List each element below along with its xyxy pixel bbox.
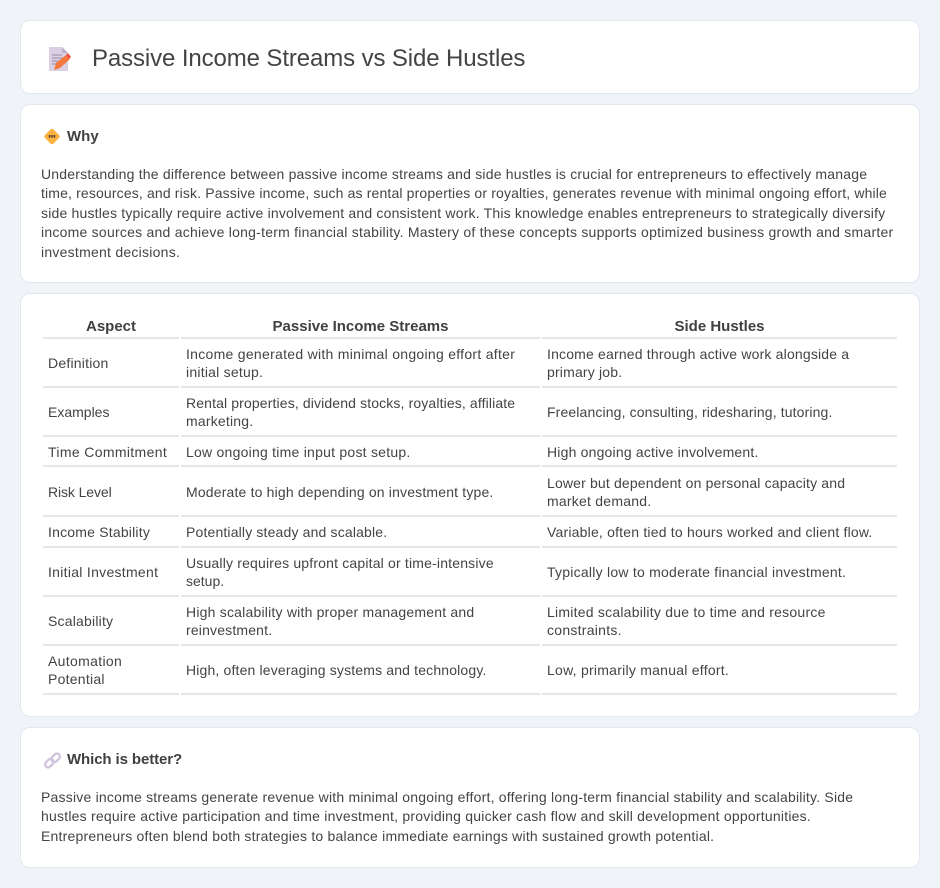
comparison table: Time Commitment [48, 444, 167, 460]
row: income stability [48, 524, 873, 540]
row: definition [48, 346, 850, 380]
comparison table: primary job. [547, 364, 622, 380]
panel: why: time, resources, and risk. Passive income, such as rental properties or royalties, generates revenue with minimal ongoing effort, while [41, 185, 887, 201]
comparison table: Scalability [48, 613, 113, 629]
comparison table: Variable, often tied to hours worked and client flow. [547, 524, 873, 540]
comparison table: initial setup. [186, 364, 263, 380]
comparison table: market demand. [547, 493, 651, 509]
comparison table: Initial Investment [48, 564, 158, 580]
comparison table: Potential [48, 671, 105, 687]
icon: document with pencil [49, 47, 71, 71]
comparison table: High scalability with proper management and [186, 604, 474, 620]
panel: why [20, 104, 920, 283]
title text: Passive Income Streams vs Side Hustles [92, 45, 525, 72]
comparison table: High, often leveraging systems and technology. [186, 662, 486, 678]
panel: which is better [20, 727, 920, 868]
comparison table: constraints. [547, 622, 622, 638]
comparison table: Side Hustles [674, 318, 765, 335]
panel: which is better: Entrepreneurs often blend both strategies to balance immediate earnings with sustained growth potential. [41, 828, 714, 844]
row: automation potential [48, 653, 729, 687]
comparison table: Limited scalability due to time and resource [547, 604, 826, 620]
icon: warning diamond [44, 128, 60, 144]
comparison table: Typically low to moderate financial investment. [547, 564, 846, 580]
icon: chain link [44, 752, 62, 769]
comparison table: Aspect [86, 318, 136, 335]
panel: which is better: hustles require active participation and time investment, providing quicker cash flow and skill development opportunities. [41, 808, 811, 824]
row: risk level [48, 475, 845, 509]
panel: why: side hustles typically require active involvement and consistent work. This knowledge enables entrepreneurs to strategically diversify [41, 205, 885, 221]
comparison table: Rental properties, dividend stocks, royalties, affiliate [186, 395, 515, 411]
comparison table: Income generated with minimal ongoing effort after [186, 346, 515, 362]
comparison table: Passive Income Streams [273, 318, 448, 335]
comparison table: Moderate to high depending on investment type. [186, 484, 493, 500]
row: scalability [48, 604, 826, 638]
comparison table: High ongoing active involvement. [547, 444, 759, 460]
why body text [41, 166, 893, 260]
comparison table: Lower but dependent on personal capacity and [547, 475, 845, 491]
comparison table: setup. [186, 573, 224, 589]
comparison table: Freelancing, consulting, ridesharing, tutoring. [547, 404, 832, 420]
comparison table: Income earned through active work alongside a [547, 346, 849, 362]
panel: which is better: Passive income streams generate revenue with minimal ongoing effort, offering long-term financial stability and scalability. Side [41, 789, 853, 805]
row: examples [48, 395, 832, 429]
comparison table: Income Stability [48, 524, 150, 540]
comparison table: Risk Level [48, 484, 112, 500]
comparison table: Low ongoing time input post setup. [186, 444, 411, 460]
comparison table: Definition [48, 355, 109, 371]
comparison table: reinvestment. [186, 622, 272, 638]
panel: why: investment decisions. [41, 244, 180, 260]
panel: title [20, 20, 920, 94]
comparison table: Low, primarily manual effort. [547, 662, 729, 678]
comparison table: Potentially steady and scalable. [186, 524, 387, 540]
table header [86, 318, 765, 335]
heading: why: Why [67, 128, 99, 145]
row: initial investment [48, 555, 846, 589]
panel: comparison table [20, 293, 920, 717]
panel: why: Understanding the difference between passive income streams and side hustles is crucial for entrepreneurs to effectively manage [41, 166, 867, 182]
comparison table: Examples [48, 404, 109, 420]
comparison table: marketing. [186, 413, 253, 429]
heading: which is better: Which is better? [67, 751, 182, 768]
panel: why: income sources and achieve long-term financial stability. Mastery of these concepts supports optimized business growth and smarter [41, 224, 893, 240]
row: time commitment [48, 444, 759, 460]
comparison table: Usually requires upfront capital or time-intensive [186, 555, 494, 571]
comparison table: Automation [48, 653, 122, 669]
which is better body text [41, 789, 853, 844]
